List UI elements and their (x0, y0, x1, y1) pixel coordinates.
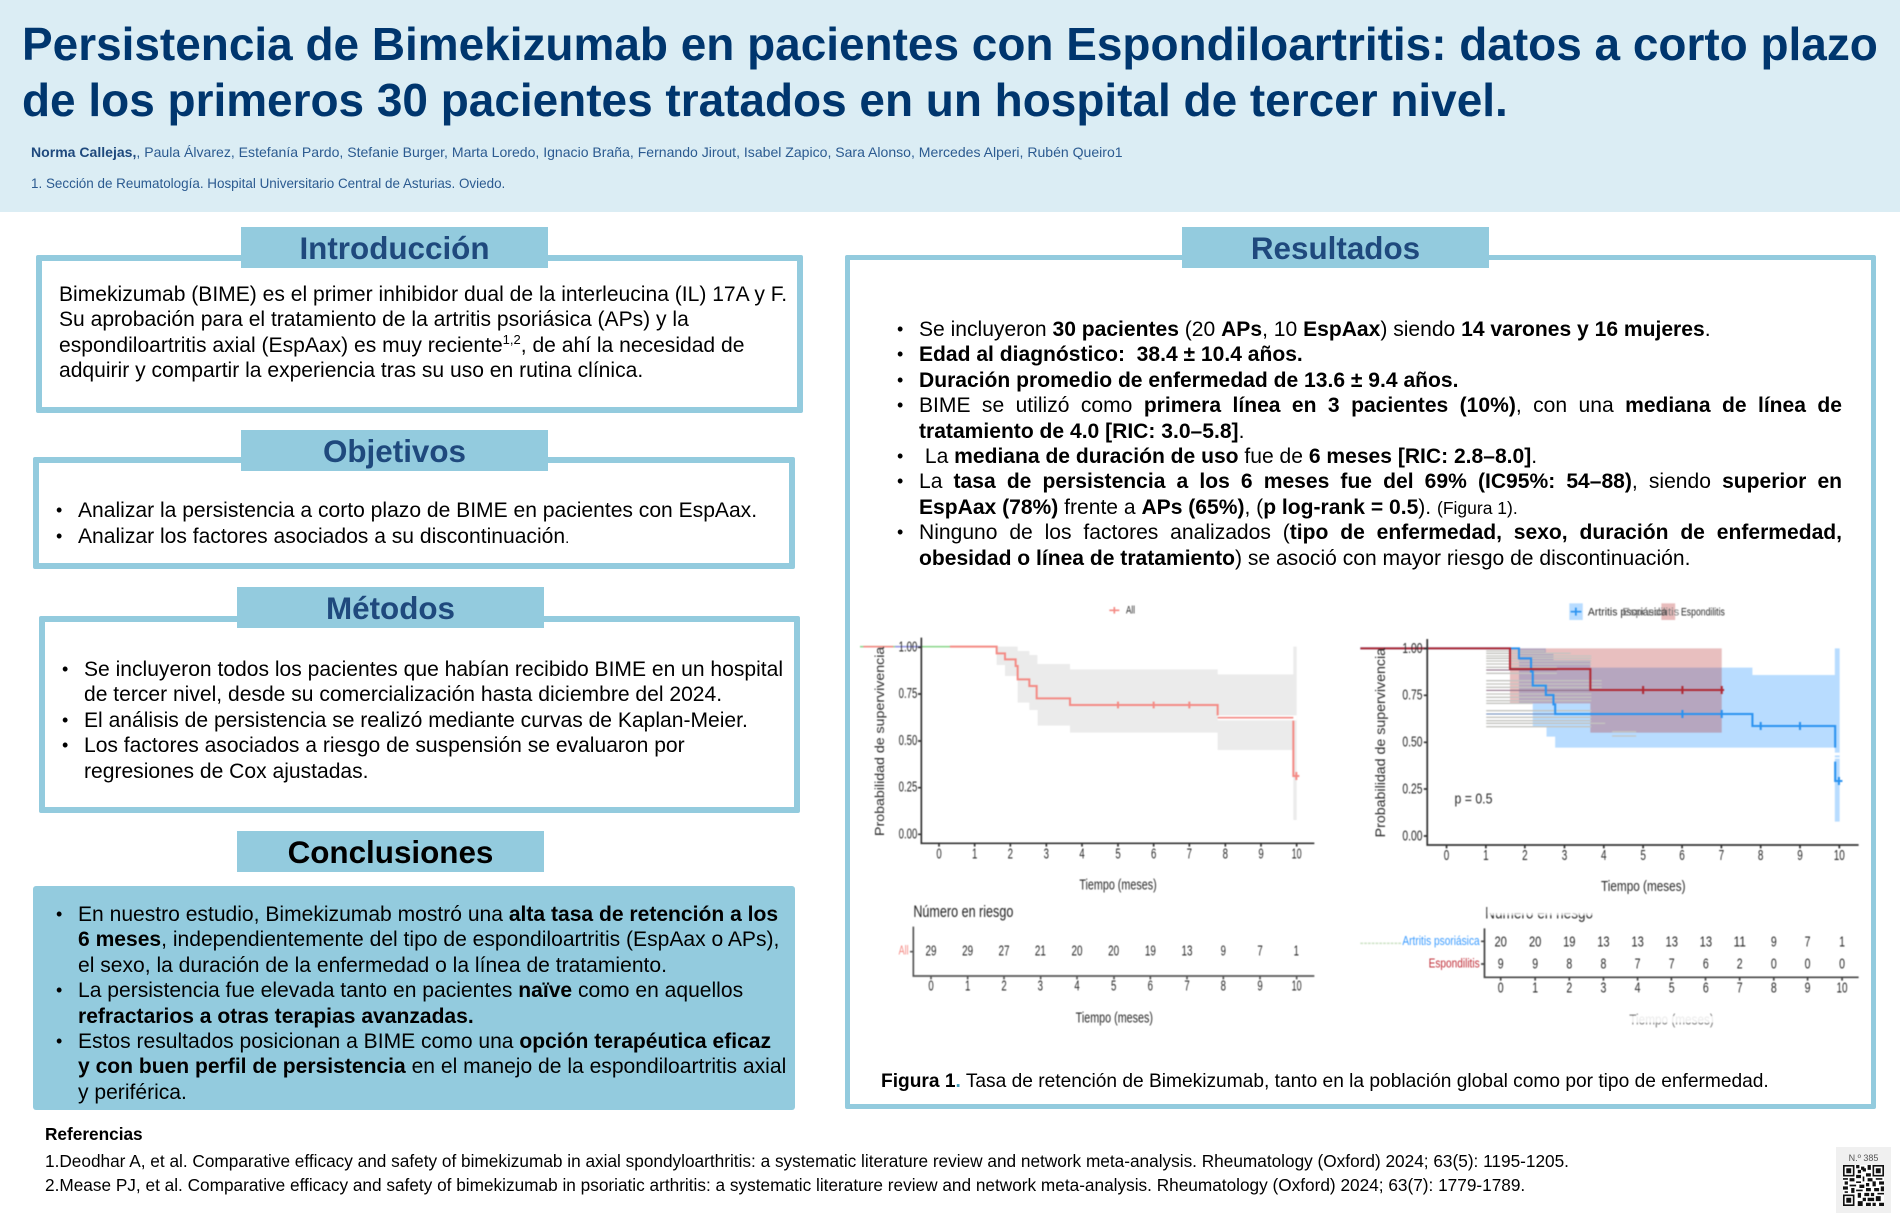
risk table: 0 (1498, 980, 1504, 996)
panel: conclusiones (33, 886, 795, 1110)
x tick labels (936, 846, 1302, 862)
risk table: 7 (1257, 944, 1263, 960)
x tick labels: 2 (1008, 846, 1013, 862)
panel: resultados (845, 255, 1876, 1109)
x tick labels: 8 (1223, 846, 1228, 862)
text: objetivos (56, 499, 757, 548)
text: resultados: La mediana de duración de uso fue de 6 meses [RIC: 2.8–8.0]. (925, 445, 1537, 468)
risk table: 0 (928, 979, 934, 995)
x tick labels: 6 (1679, 847, 1685, 864)
heading: resultados: Resultados (1251, 231, 1420, 266)
y tick labels: 0.00 (1402, 828, 1422, 844)
image artifact stripes (1486, 651, 1636, 736)
text: conclusiones: 6 meses, independientemente del tipo de espondiloartritis (EspAax o APs), (78, 928, 779, 951)
risk table: 1 (1294, 944, 1299, 960)
y tick labels: 1.00 (899, 639, 917, 655)
references (45, 1124, 1569, 1195)
risk table: 3 (1038, 979, 1043, 995)
text: conclusiones: En nuestro estudio, Bimekizumab mostró una alta tasa de retención a los (78, 903, 778, 926)
x tick labels: 4 (1079, 846, 1085, 862)
y tick labels (1402, 640, 1422, 844)
y tick labels: 0.50 (1402, 734, 1422, 751)
heading: introducción: Introducción (299, 231, 490, 266)
axes (918, 638, 1314, 847)
chart: Kaplan-Meier por enfermedad (1360, 602, 1860, 1028)
risk table: 8 (1566, 956, 1572, 973)
risk table: 9 (1498, 956, 1504, 973)
legend: Artritis psoriásica (1588, 606, 1668, 618)
text: resultados (898, 318, 1842, 570)
risk table: 11 (1733, 934, 1746, 950)
text: conclusiones: Estos resultados posicionan a BIME como una opción terapéutica eficaz (78, 1030, 771, 1053)
risk table: 13 (1182, 944, 1192, 960)
risk table: 9 (1771, 934, 1777, 950)
risk table: 20 (1072, 944, 1082, 960)
x tick labels: 3 (1044, 846, 1049, 862)
x tick labels: 5 (1640, 847, 1646, 864)
legend: Espondilitis (1681, 606, 1725, 618)
risk table (1360, 898, 1859, 1028)
y axis title: Probabilidad de supervivencia (1373, 648, 1388, 837)
text: resultados: Edad al diagnóstico: 38.4 ± 10.4 años. (919, 343, 1303, 366)
text: conclusiones: el sexo, la duración de la enfermedad o la línea de tratamiento. (78, 954, 667, 977)
risk table: 9 (1221, 944, 1226, 960)
affiliation: 1. Sección de Reumatología. Hospital Universitario Central de Asturias. Oviedo. (31, 176, 505, 191)
x tick labels: 4 (1601, 847, 1607, 864)
text: resultados: Ninguno de los factores analizados (tipo de enfermedad, sexo, duración de enfermedad, (919, 521, 1842, 544)
risk table: 7 (1669, 956, 1675, 973)
x tick labels: 7 (1719, 847, 1724, 864)
x tick labels: 1 (972, 846, 977, 862)
risk table: 13 (1631, 934, 1644, 950)
text: introducción: Su aprobación para el tratamiento de la artritis psoriásica (APs) y la (59, 308, 689, 331)
text: métodos: Se incluyeron todos los pacientes que habían recibido BIME en un hospital (84, 658, 783, 681)
title: Persistencia de Bimekizumab en pacientes con Espondiloartritis: datos a corto plazo (22, 18, 1878, 70)
risk table: 7 (1737, 980, 1743, 996)
x tick labels: 2 (1522, 847, 1528, 864)
heading: métodos: Métodos (326, 591, 455, 626)
title: de los primeros 30 pacientes tratados en un hospital de tercer nivel. (22, 74, 1508, 126)
risk table: 5 (1669, 980, 1675, 996)
legend: Espondilitis (1622, 606, 1680, 618)
x tick labels: 0 (936, 846, 942, 862)
risk table: 9 (1532, 956, 1538, 973)
heading: objetivos (241, 430, 548, 471)
text: resultados: tratamiento de 4.0 [RIC: 3.0–5.8]. (919, 420, 1244, 443)
heading: resultados (1182, 227, 1489, 268)
risk table: 4 (1635, 980, 1641, 996)
risk table: Número en riesgo (913, 902, 1013, 921)
text: métodos: regresiones de Cox ajustadas. (84, 760, 369, 783)
panel: introducción (36, 255, 803, 413)
risk table: 9 (1805, 980, 1811, 996)
x axis title: Tiempo (meses) (1079, 877, 1157, 893)
risk table: 2 (1566, 980, 1572, 996)
x tick labels: 5 (1115, 846, 1121, 862)
risk table: 6 (1703, 956, 1709, 973)
risk table: Espondilitis (1429, 956, 1480, 971)
text: resultados: obesidad o línea de tratamiento) se asoció con mayor riesgo de discontinuación. (919, 547, 1690, 570)
text: conclusiones: y con buen perfil de persistencia en el manejo de la espondiloartritis axial (78, 1055, 786, 1078)
confidence bands (1519, 648, 1840, 822)
header band (0, 0, 1900, 212)
x tick labels: 3 (1562, 847, 1567, 864)
QR code (1836, 1147, 1891, 1213)
figure caption: Figura 1. Tasa de retención de Bimekizumab, tanto en la población global como por tipo de enfermedad. (881, 1071, 1769, 1092)
y tick labels (899, 639, 917, 842)
risk table: Tiempo (meses) (1629, 1012, 1714, 1028)
references: 1.Deodhar A, et al. Comparative efficacy and safety of bimekizumab in axial spondyloarthritis: a systematic literature review and network meta-analysis. Rheumatology (Oxford) 2024; 63(5): 1195-1205. (45, 1150, 1569, 1170)
y tick labels: 0.25 (899, 780, 917, 796)
risk table: 19 (1563, 934, 1576, 950)
risk table: 0 (1839, 956, 1845, 973)
risk table: 4 (1074, 979, 1080, 995)
x tick labels: 1 (1483, 847, 1489, 864)
risk table: 6 (1148, 979, 1153, 995)
risk table: 20 (1494, 934, 1507, 950)
x tick labels: 9 (1258, 846, 1264, 862)
risk table: 3 (1601, 980, 1606, 996)
text: introducción: adquirir y compartir la experiencia tras su uso en rutina clínica. (59, 359, 643, 382)
risk table: 2 (1001, 979, 1007, 995)
risk table: 7 (1805, 934, 1811, 950)
risk table: 6 (1703, 980, 1709, 996)
risk table: 2 (1737, 956, 1743, 973)
text: resultados: Se incluyeron 30 pacientes (20 APs, 10 EspAax) siendo 14 varones y 16 mujeres. (919, 318, 1711, 341)
x tick labels: 6 (1151, 846, 1156, 862)
risk table: 21 (1035, 944, 1046, 960)
survival curve (950, 647, 1299, 780)
risk table: 1 (1839, 934, 1845, 950)
risk table: Artritis psoriásica (1402, 933, 1480, 948)
risk table: 13 (1666, 934, 1678, 950)
heading: introducción (241, 227, 548, 268)
x tick labels: 10 (1292, 846, 1302, 862)
y tick labels: 0.00 (899, 826, 917, 842)
risk table: Número en riesgo (1485, 904, 1593, 923)
risk table: 9 (1257, 979, 1263, 995)
legend: All (1126, 605, 1135, 617)
chart: Kaplan-Meier global (860, 605, 1316, 1026)
panel: objetivos (33, 457, 795, 569)
risk table: 1 (1532, 980, 1538, 996)
text: resultados: Duración promedio de enfermedad de 13.6 ± 9.4 años. (919, 369, 1458, 392)
text: objetivos: Analizar la persistencia a corto plazo de BIME en pacientes con EspAax. (78, 499, 757, 522)
risk table: 8 (1221, 979, 1226, 995)
risk table: 19 (1145, 944, 1156, 960)
x tick labels: 0 (1444, 847, 1449, 864)
y axis title: Probabilidad de supervivencia (872, 646, 887, 836)
y tick labels: 0.50 (899, 733, 917, 749)
legend (1109, 605, 1135, 617)
heading: conclusiones (237, 831, 544, 872)
risk table: Tiempo (meses) (1076, 1010, 1153, 1026)
references: 2.Mease PJ, et al. Comparative efficacy and safety of bimekizumab in psoriatic arthritis: a systematic literature review and network meta-analysis. Rheumatology (Oxford) 2024; 63(7): 1779-1789. (45, 1175, 1525, 1195)
text: introducción: Bimekizumab (BIME) es el primer inhibidor dual de la interleucina (IL) 17A y F. (59, 283, 787, 306)
y tick labels: 0.75 (899, 686, 917, 702)
x tick labels: 9 (1797, 847, 1803, 864)
QR code: N.º 385 (1849, 1153, 1878, 1163)
text: métodos (62, 658, 783, 783)
risk table: 10 (1292, 979, 1302, 995)
risk table: 20 (1108, 944, 1119, 960)
risk table (899, 902, 1314, 1026)
risk table: 29 (926, 944, 936, 960)
risk table: 29 (962, 944, 973, 960)
y tick labels: 0.75 (1402, 687, 1422, 704)
x axis title: Tiempo (meses) (1601, 878, 1686, 895)
text: conclusiones (56, 903, 786, 1104)
text: conclusiones: refractarios a otras terapias avanzadas. (78, 1005, 474, 1028)
x tick labels (1444, 847, 1845, 864)
text: objetivos: Analizar los factores asociados a su discontinuación. (78, 525, 569, 548)
y tick labels: 0.25 (1402, 781, 1422, 797)
text: métodos: El análisis de persistencia se realizó mediante curvas de Kaplan-Meier. (84, 709, 748, 732)
title (22, 18, 1878, 126)
survival curves (1360, 648, 1842, 785)
risk table: 13 (1597, 934, 1610, 950)
x tick labels: 7 (1187, 846, 1192, 862)
x tick labels: 8 (1758, 847, 1763, 864)
panel: métodos (39, 616, 800, 813)
text: métodos: de tercer nivel, desde su comercialización hasta diciembre del 2024. (84, 683, 722, 706)
p value: p = 0.5 (1454, 791, 1492, 807)
text: introducción: espondiloartritis axial (EspAax) es muy reciente1,2, de ahí la necesidad de (59, 332, 744, 357)
risk table: 0 (1805, 956, 1811, 973)
risk table: 1 (965, 979, 970, 995)
text: conclusiones: y periférica. (78, 1081, 187, 1104)
risk table: 13 (1700, 934, 1712, 950)
confidence band (997, 647, 1297, 820)
heading: métodos (237, 587, 544, 628)
risk table: 10 (1837, 980, 1848, 996)
text: conclusiones: La persistencia fue elevada tanto en pacientes naïve como en aquellos (78, 979, 743, 1002)
risk table: 7 (1635, 956, 1641, 973)
text: introducción (59, 283, 787, 382)
text: resultados: La tasa de persistencia a los 6 meses fue del 69% (IC95%: 54–88), siendo superior en (919, 470, 1842, 493)
x tick labels: 10 (1834, 847, 1845, 864)
authors: Norma Callejas,, Paula Álvarez, Estefanía Pardo, Stefanie Burger, Marta Loredo, Ignacio Braña, Fernando Jirout, Isabel Zapico, Sara Alonso, Mercedes Alperi, Rubén Queiro1 (31, 144, 1123, 160)
risk table: 0 (1771, 956, 1777, 973)
y tick labels: 1.00 (1402, 640, 1422, 657)
heading: objetivos: Objetivos (323, 434, 466, 469)
legend (1569, 603, 1725, 620)
risk table: 7 (1184, 979, 1190, 995)
risk table: 8 (1601, 956, 1606, 973)
text: resultados: EspAax (78%) frente a APs (65%), (p log-rank = 0.5). (Figura 1). (919, 496, 1518, 519)
references: Referencias (45, 1124, 143, 1144)
heading: conclusiones: Conclusiones (288, 835, 493, 870)
risk table: 5 (1111, 979, 1116, 995)
text: métodos: Los factores asociados a riesgo de suspensión se evaluaron por (84, 734, 685, 757)
risk table: 8 (1771, 980, 1777, 996)
text: resultados: BIME se utilizó como primera línea en 3 pacientes (10%), con una mediana de línea de (919, 394, 1842, 417)
risk table: 27 (998, 944, 1010, 960)
risk table: All (899, 944, 909, 958)
axes (1424, 639, 1859, 848)
risk table: 20 (1529, 934, 1541, 950)
